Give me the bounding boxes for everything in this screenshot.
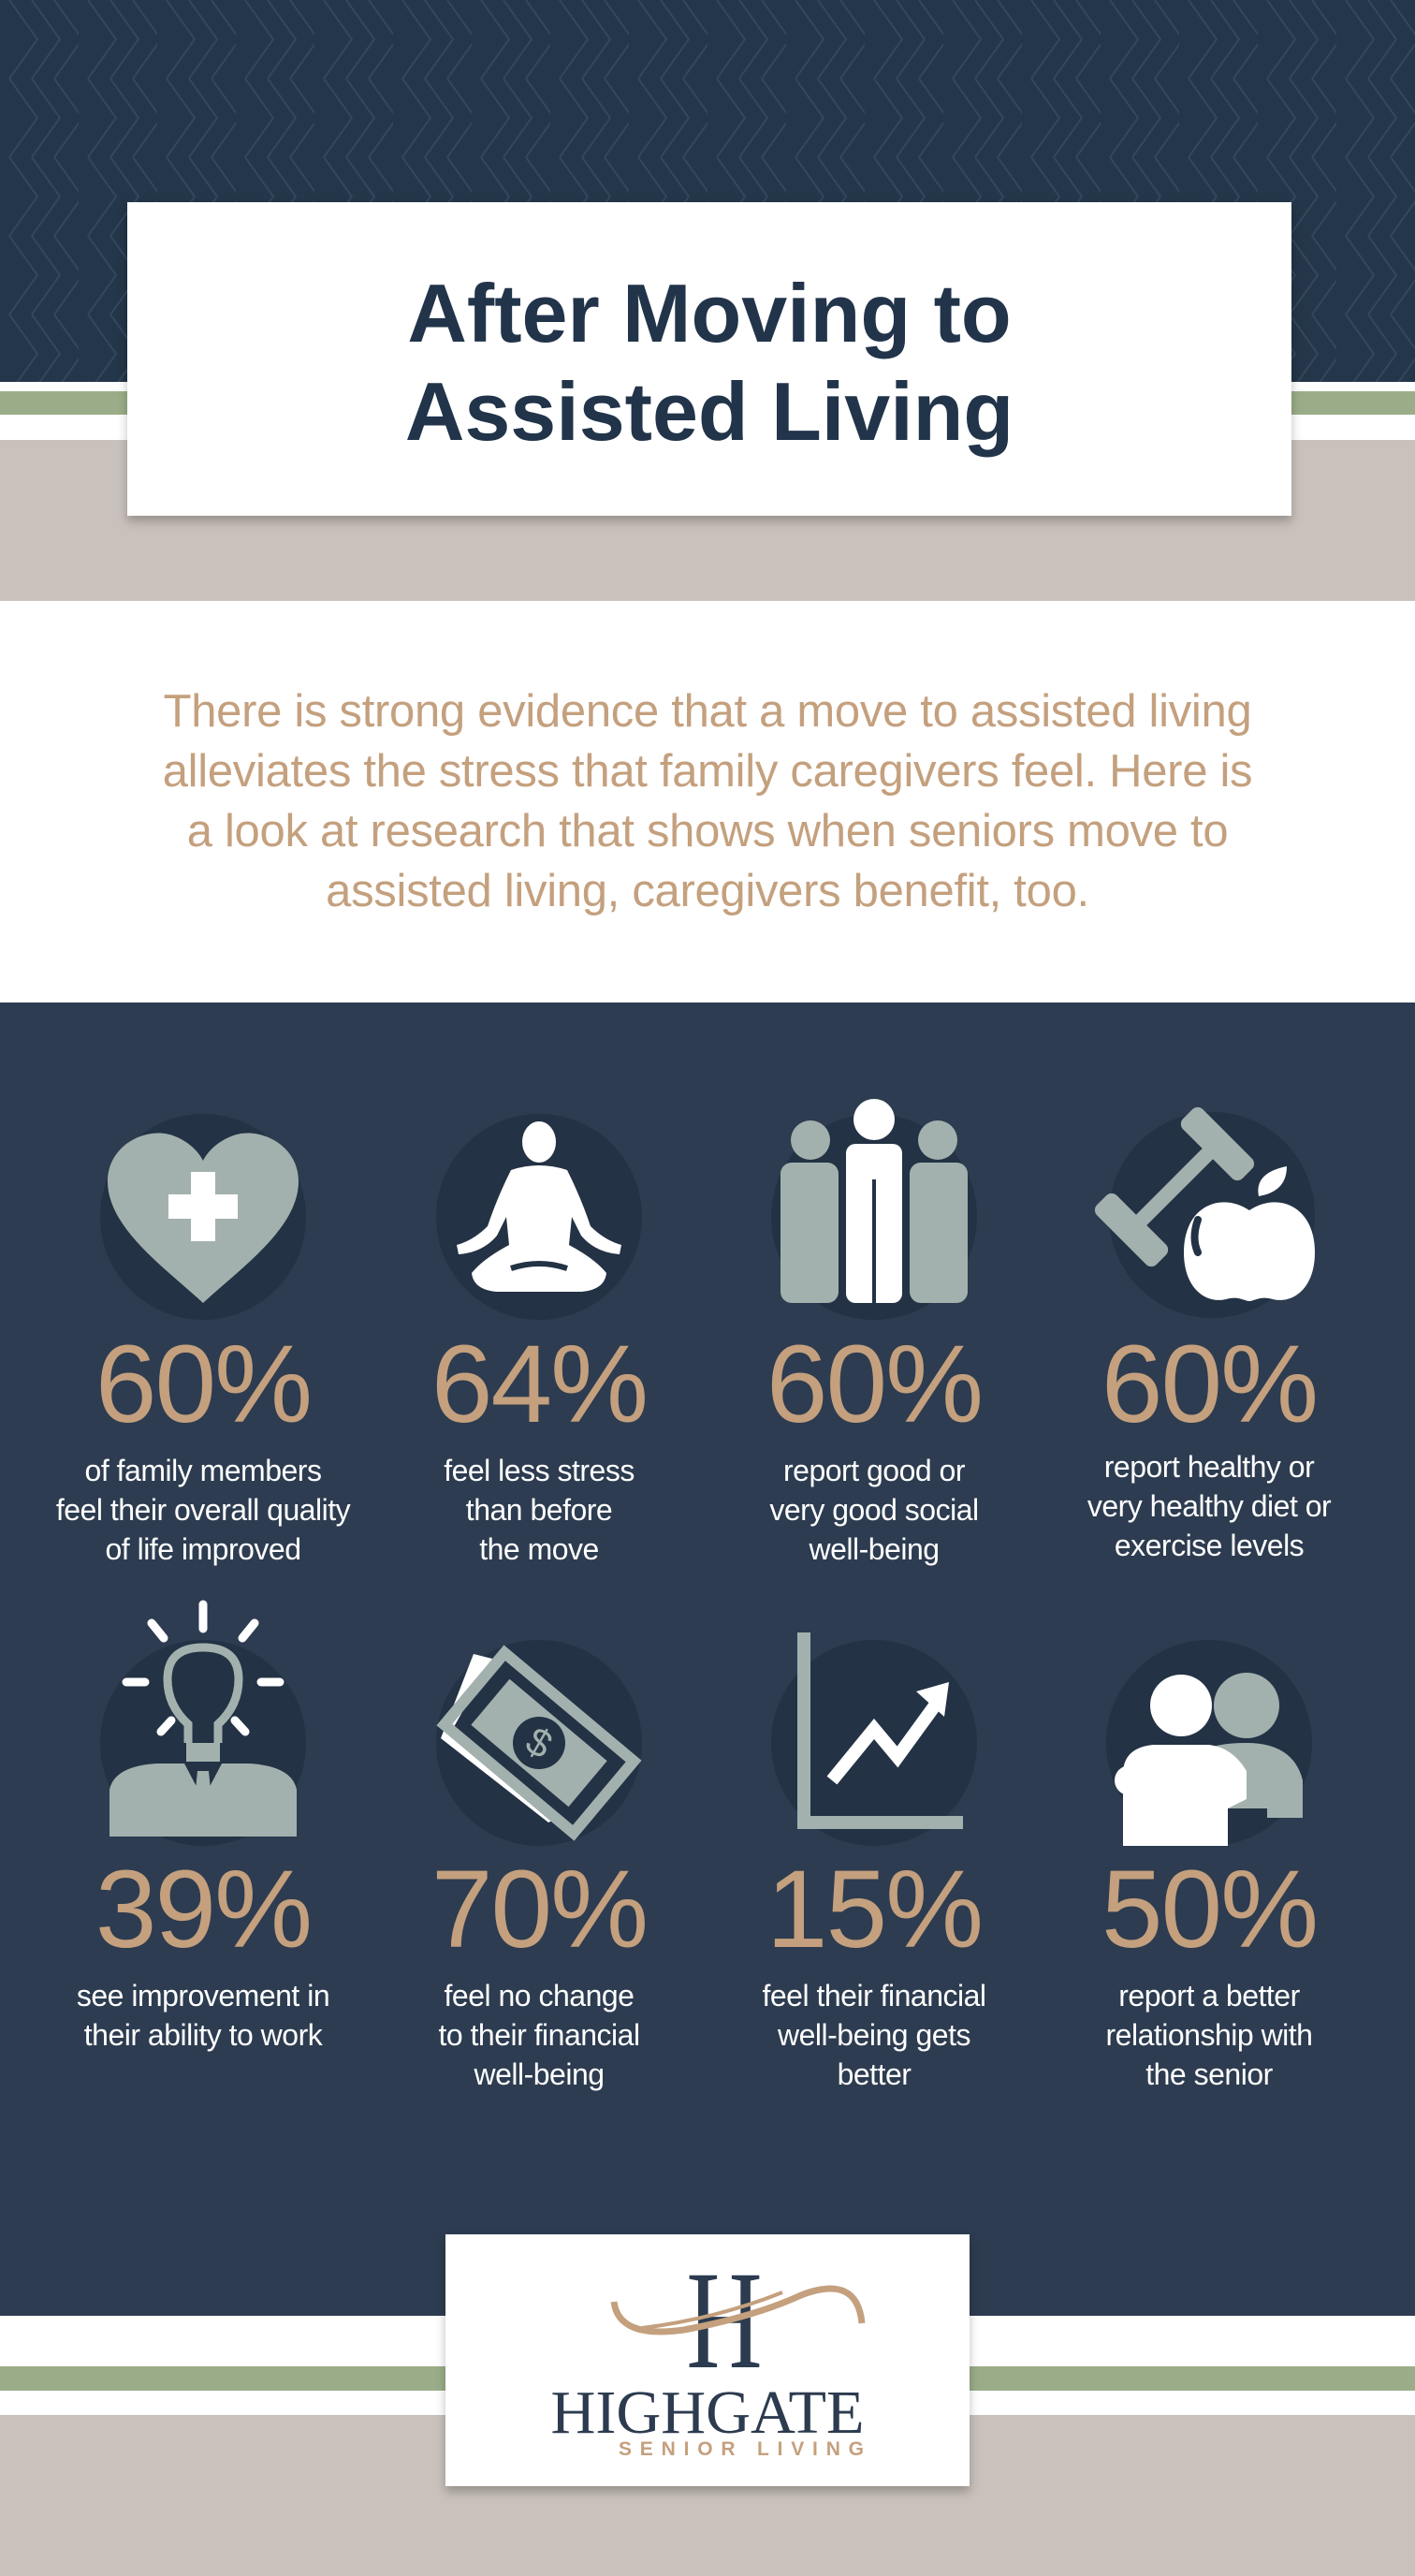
stat 7 <box>762 1848 986 2091</box>
icon: money: $ <box>518 1718 560 1767</box>
logo <box>445 2234 970 2486</box>
stat 1: of life improved <box>105 1532 300 1566</box>
stat 1: feel their overall quality <box>56 1493 350 1527</box>
stat 2: 64% <box>431 1323 647 1446</box>
icon: money <box>436 1640 642 1846</box>
stat 5: see improvement in <box>77 1979 329 2012</box>
stat 1 <box>56 1323 350 1566</box>
stat 8: the senior <box>1145 2057 1273 2091</box>
stat 6: 70% <box>431 1848 647 1971</box>
stat 3: very good social <box>769 1493 979 1527</box>
logo H mark: H <box>686 2242 763 2398</box>
stat 8 <box>1101 1848 1317 2091</box>
stat 2 <box>431 1323 647 1566</box>
stat 7: feel their financial <box>762 1979 986 2012</box>
stat 5: their ability to work <box>84 2018 322 2052</box>
stat 6 <box>431 1848 647 2091</box>
stat 7: better <box>838 2057 911 2091</box>
stat 5: 39% <box>95 1848 311 1971</box>
icon: lightbulb <box>100 1604 306 1846</box>
stat 8: relationship with <box>1106 2018 1312 2052</box>
stat 8: report a better <box>1118 1979 1300 2012</box>
stat 7: 15% <box>766 1848 982 1971</box>
stat 4: very healthy diet or <box>1087 1489 1331 1523</box>
title: After Moving to <box>407 267 1012 359</box>
stat 2: the move <box>479 1532 599 1566</box>
stat 4: exercise levels <box>1115 1529 1304 1562</box>
icon: people <box>771 1099 977 1320</box>
logo: HIGHGATE <box>550 2378 865 2447</box>
stat 7: well-being gets <box>778 2018 970 2052</box>
intro paragraph: alleviates the stress that family caregivers feel. Here is <box>163 746 1252 797</box>
intro paragraph <box>0 601 1415 1003</box>
intro paragraph: a look at research that shows when seniors move to <box>187 806 1228 856</box>
title <box>127 202 1291 516</box>
stat 6: to their financial <box>438 2018 640 2052</box>
stat 6: well-being <box>474 2057 605 2091</box>
stat 6: feel no change <box>445 1979 634 2012</box>
stat 4: report healthy or <box>1104 1450 1314 1484</box>
stats panel icons <box>100 1099 1315 1846</box>
stat 1: 60% <box>95 1323 311 1446</box>
icon: chart <box>771 1632 977 1846</box>
stat 3: 60% <box>766 1323 982 1446</box>
title: Assisted Living <box>405 365 1014 458</box>
stat 5 <box>77 1848 329 2052</box>
logo H mark <box>614 2242 862 2398</box>
stat 3 <box>766 1323 982 1566</box>
stat 2: than before <box>466 1493 612 1527</box>
icon: two people <box>1106 1640 1312 1846</box>
icon: heart <box>100 1114 306 1320</box>
stat 4: 60% <box>1101 1323 1317 1446</box>
intro paragraph: assisted living, caregivers benefit, too. <box>326 866 1089 916</box>
stat 8: 50% <box>1101 1848 1317 1971</box>
stat 3: well-being <box>809 1532 940 1566</box>
icon: dumbbell and apple <box>1092 1105 1315 1318</box>
header background pattern <box>0 0 1415 382</box>
stat 1: of family members <box>85 1454 321 1487</box>
stat 4 <box>1087 1323 1331 1562</box>
intro paragraph: There is strong evidence that a move to assisted living <box>164 686 1251 737</box>
logo: SENIOR LIVING <box>619 2438 864 2460</box>
stat 3: report good or <box>783 1454 965 1487</box>
stat 2: feel less stress <box>444 1454 635 1487</box>
icon: meditation <box>436 1114 642 1320</box>
